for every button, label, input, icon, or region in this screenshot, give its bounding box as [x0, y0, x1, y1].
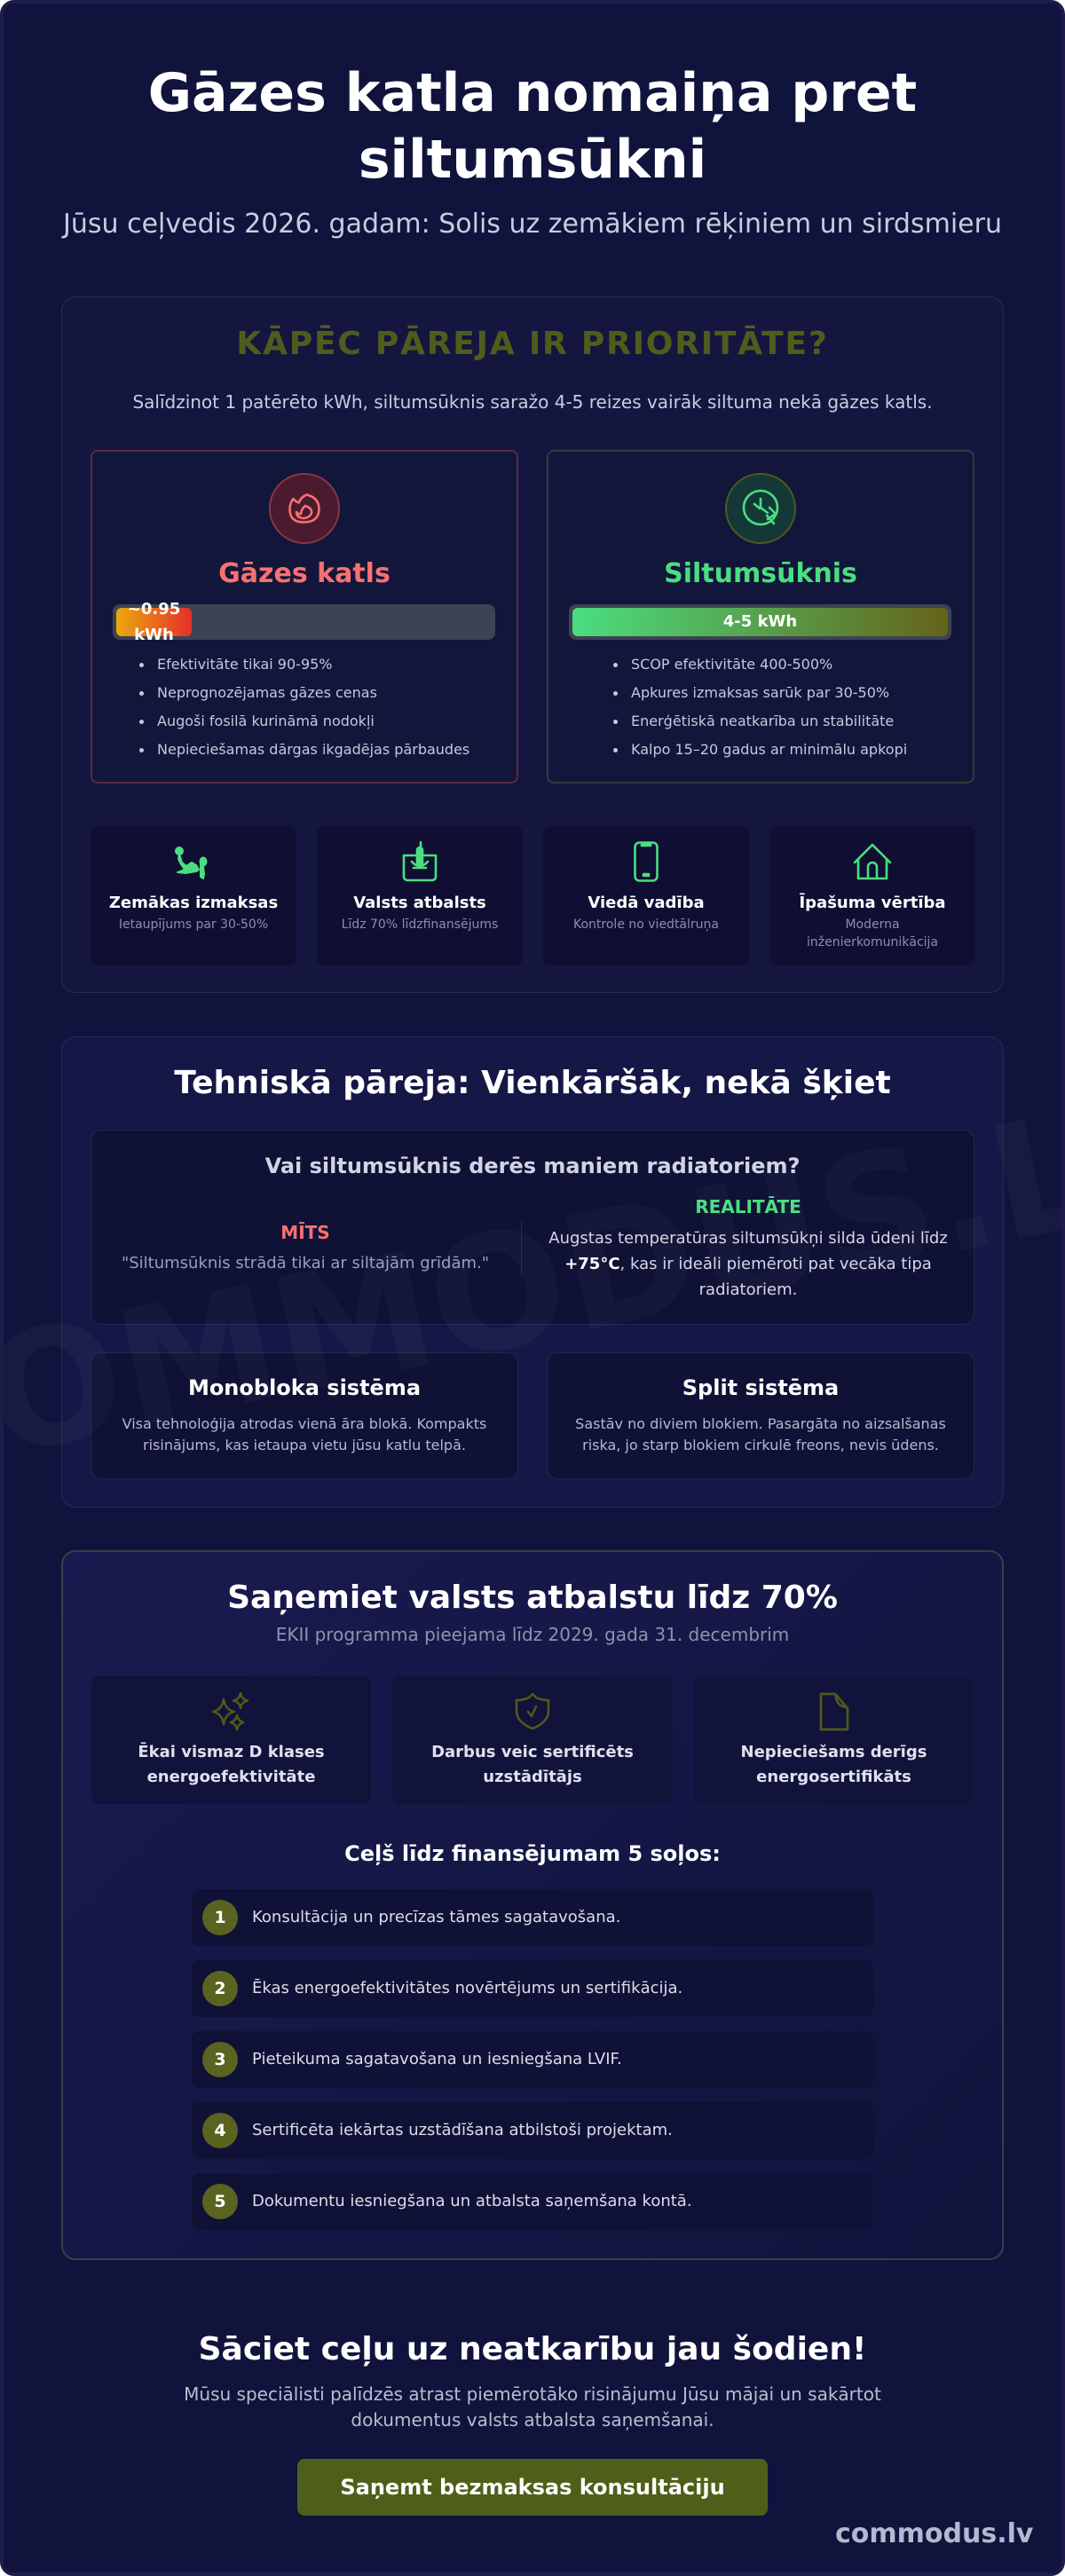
step 4: 4: [214, 2121, 226, 2140]
benefits list: gas: Neprognozējamas gāzes cenas: [157, 684, 377, 701]
feature title: Valsts atbalsts: [353, 894, 486, 912]
bar value: gas: ~0.95 kWh: [128, 600, 180, 644]
benefits list: heat pump: Apkures izmaksas sarūk par 30-50%: [631, 684, 889, 701]
title: siltumsūkni: [359, 129, 706, 191]
heading: technical: Tehniskā pāreja: Vienkāršāk, nekā šķiet: [174, 1065, 891, 1101]
requirement text: uzstādītājs: [483, 1768, 582, 1786]
feature note: inženierkomunikācija: [807, 935, 938, 949]
icon: clock: [725, 473, 796, 544]
step 2: [192, 1960, 873, 2017]
myth: [122, 1222, 489, 1272]
benefits list: gas: [139, 656, 469, 758]
efficiency bar: gas: [113, 604, 495, 640]
feature title: Zemākas izmaksas: [109, 894, 278, 912]
panel: state support: [61, 1550, 1004, 2260]
icon: document: [820, 1693, 848, 1730]
question: Vai siltumsūknis derēs maniem radiatoriem?: [265, 1154, 800, 1178]
call to action button: [297, 2459, 768, 2516]
split text: [575, 1415, 946, 1453]
myth label: MĪTS: [280, 1222, 330, 1243]
step 5: Dokumentu iesniegšana un atbalsta saņemšana kontā.: [252, 2192, 692, 2210]
benefits list: heat pump: [613, 656, 907, 758]
icon: savings: [175, 847, 208, 879]
bar fill: gas: [116, 608, 192, 636]
icon: bucket: [403, 841, 437, 882]
heat pump name: Siltumsūknis: [664, 558, 857, 589]
benefits list: gas: Augoši fosilā kurināmā nodokļi: [157, 713, 375, 729]
reality text: +75°C, kas ir ideāli piemēroti pat vecāka tipa: [564, 1255, 932, 1273]
monoblock text: risinājums, kas ietaupa vietu jūsu katlu telpā.: [143, 1437, 466, 1453]
feature title: Viedā vadība: [588, 894, 705, 912]
icon: sparkles: [211, 1691, 248, 1730]
step 5: 5: [214, 2192, 226, 2211]
heading: why priority: KĀPĒC PĀREJA IR PRIORITĀTE?: [236, 326, 829, 362]
card: split: [547, 1352, 974, 1479]
requirement text: energosertifikāts: [756, 1768, 911, 1786]
feature note: Moderna: [845, 918, 900, 932]
efficiency bar: heat pump: [569, 604, 951, 640]
benefits list: gas: Nepieciešamas dārgas ikgadējas pārbaudes: [157, 741, 469, 758]
call to action text: Mūsu speciālisti palīdzēs atrast piemērotāko risinājumu Jūsu mājai un sakārtot: [184, 2383, 881, 2405]
step 5: [192, 2173, 873, 2230]
step 3: 3: [214, 2050, 226, 2069]
card: monoblock: [91, 1352, 518, 1479]
requirement text: [431, 1743, 634, 1786]
icon: flame: [269, 473, 340, 544]
feature card: lower costs: [91, 826, 296, 965]
step 3: Pieteikuma sagatavošana un iesniegšana LVIF.: [252, 2050, 622, 2068]
requirement text: [138, 1743, 325, 1786]
split title: Split sistēma: [682, 1375, 839, 1400]
call to action text: dokumentus valsts atbalsta saņemšanai.: [351, 2409, 714, 2430]
monoblock text: [122, 1415, 486, 1453]
step 4: Sertificēta iekārtas uzstādīšana atbilstoši projektam.: [252, 2121, 673, 2139]
heading: five steps: Ceļš līdz finansējumam 5 soļos:: [344, 1841, 721, 1866]
step 1: 1: [214, 1908, 226, 1927]
requirement text: Darbus veic sertificēts: [431, 1743, 634, 1761]
reality text: Augstas temperatūras siltumsūkņi silda ūdeni līdz: [548, 1229, 948, 1248]
requirement text: Nepieciešams derīgs: [741, 1743, 927, 1761]
myth text: "Siltumsūknis strādā tikai ar siltajām grīdām.": [122, 1254, 489, 1272]
myth card: [91, 1130, 974, 1325]
call to action text: [184, 2383, 881, 2430]
step 2: 2: [214, 1979, 226, 1998]
icon: phone: [634, 841, 659, 882]
requirement text: Ēkai vismaz D klases: [138, 1743, 325, 1761]
monoblock text: Visa tehnoloģija atrodas vienā āra blokā. Kompakts: [122, 1415, 486, 1432]
bar value: heat pump: 4-5 kWh: [723, 612, 797, 631]
brand: commodus.lv: [835, 2518, 1033, 2549]
requirement: energy certificate: [694, 1676, 974, 1804]
step 2: Ēkas energoefektivitātes novērtējums un sertifikācija.: [252, 1979, 682, 1997]
icon: shield: [515, 1693, 550, 1730]
icon: house: [854, 843, 891, 880]
monoblock title: Monobloka sistēma: [188, 1375, 421, 1400]
feature note: Ietaupījums par 30-50%: [119, 918, 268, 932]
feature note: Līdz 70% līdzfinansējums: [342, 918, 498, 932]
intro text: Salīdzinot 1 patērēto kWh, siltumsūknis saražo 4-5 reizes vairāk siltuma nekā gāzes katls.: [132, 391, 933, 413]
gas boiler name: Gāzes katls: [218, 558, 390, 589]
call to action button: Saņemt bezmaksas konsultāciju: [340, 2475, 725, 2500]
split text: riska, jo starp blokiem cirkulē freons, nevis ūdens.: [582, 1437, 939, 1453]
benefits list: heat pump: Kalpo 15–20 gadus ar minimālu apkopi: [631, 741, 907, 758]
call to action heading: Sāciet ceļu uz neatkarību jau šodien!: [199, 2331, 866, 2367]
benefits list: gas: Efektivitāte tikai 90-95%: [157, 656, 332, 673]
step 4: [192, 2102, 873, 2159]
feature note: Kontrole no viedtālruņa: [573, 918, 719, 932]
benefits list: heat pump: SCOP efektivitāte 400-500%: [631, 656, 832, 673]
panel: why switch: [61, 296, 1004, 993]
feature card: property value: [769, 826, 975, 965]
panel: heat pump: [547, 450, 974, 784]
subtitle: Jūsu ceļvedis 2026. gadam: Solis uz zemākiem rēķiniem un sirdsmieru: [63, 209, 1002, 240]
reality text: [548, 1229, 948, 1299]
requirement text: energoefektivitāte: [147, 1768, 315, 1786]
title: Gāzes katla nomaiņa pret: [148, 62, 917, 124]
requirement text: [741, 1743, 927, 1786]
requirement: certified installer: [392, 1676, 673, 1804]
step 3: [192, 2031, 873, 2088]
panel: technical transition: [61, 1036, 1004, 1508]
split text: Sastāv no diviem blokiem. Pasargāta no aizsalšanas: [575, 1415, 946, 1432]
feature note: [807, 918, 938, 949]
reality label: REALITĀTE: [695, 1196, 801, 1217]
bar fill: heat pump: [572, 608, 948, 636]
feature card: state support: [317, 826, 523, 965]
reality text: radiatoriem.: [699, 1280, 797, 1299]
step 1: [192, 1889, 873, 1946]
benefits list: heat pump: Enerģētiskā neatkarība un stabilitāte: [631, 713, 894, 729]
panel: gas boiler: [91, 450, 518, 784]
step 1: Konsultācija un precīzas tāmes sagatavošana.: [252, 1908, 620, 1926]
support subtitle: EKII programma pieejama līdz 2029. gada 31. decembrim: [276, 1624, 789, 1645]
reality: [548, 1196, 948, 1299]
feature title: Īpašuma vērtība: [799, 894, 946, 912]
feature card: smart control: [543, 826, 749, 965]
heading: support: Saņemiet valsts atbalstu līdz 70%: [227, 1579, 838, 1616]
requirement: D class: [91, 1676, 371, 1804]
title: [148, 62, 917, 191]
